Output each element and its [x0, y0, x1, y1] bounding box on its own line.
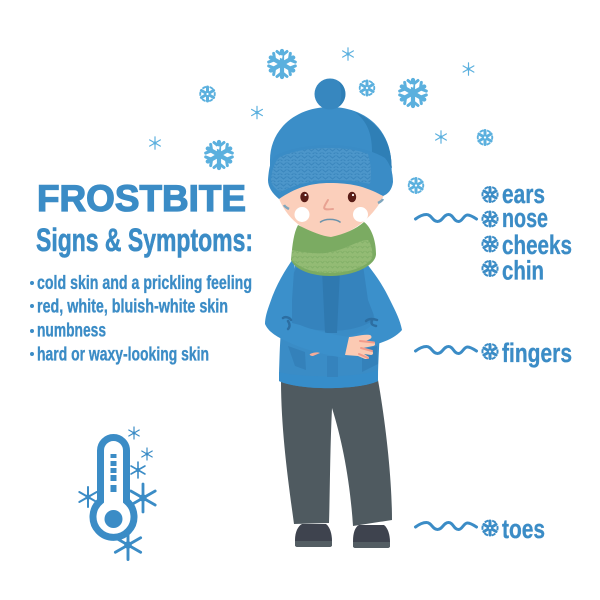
face: [276, 170, 386, 238]
symptom: cold skin: cold skin and a prickling feeling: [37, 273, 252, 294]
pants: [281, 380, 392, 526]
mouth: [320, 219, 340, 222]
label: nose: [481, 203, 548, 233]
cheeks: [294, 207, 368, 222]
cuff marks: [283, 317, 377, 329]
thermometer icon: [79, 427, 155, 560]
symptoms list: [30, 273, 252, 366]
subtitle: Signs & Symptoms:: [36, 222, 253, 258]
symptom: numbness: numbness: [37, 320, 106, 342]
callout: fingers: [416, 338, 572, 368]
jacket: [265, 256, 402, 388]
symptom: numbness: [30, 320, 106, 342]
title: FROSTBITE: [37, 178, 246, 219]
arms: [265, 256, 402, 358]
symptom: hard skin: hard or waxy-looking skin: [37, 344, 209, 366]
pompom: [314, 78, 346, 110]
callout: face: [416, 179, 572, 286]
character: [265, 78, 402, 548]
hat: [268, 78, 393, 199]
callout: toes: toes: [502, 514, 545, 544]
label: chin: chin: [502, 256, 544, 286]
label: ears: ears: [502, 179, 545, 209]
scarf: [291, 222, 376, 276]
label: ears: [481, 179, 545, 209]
symptom: skin colour: red, white, bluish-white skin: [37, 296, 228, 318]
callout: fingers: fingers: [502, 338, 572, 368]
falling snowflakes: [150, 48, 494, 194]
hands: [310, 335, 375, 359]
shoes: [295, 524, 390, 548]
label: cheeks: [481, 230, 572, 260]
eyes: [300, 192, 356, 202]
wave arrow: face: [416, 214, 476, 222]
label: cheeks: cheeks: [502, 230, 572, 260]
callout: toes: [416, 514, 545, 544]
label: nose: nose: [502, 203, 548, 233]
label: chin: [481, 256, 544, 286]
nose: [324, 200, 333, 209]
